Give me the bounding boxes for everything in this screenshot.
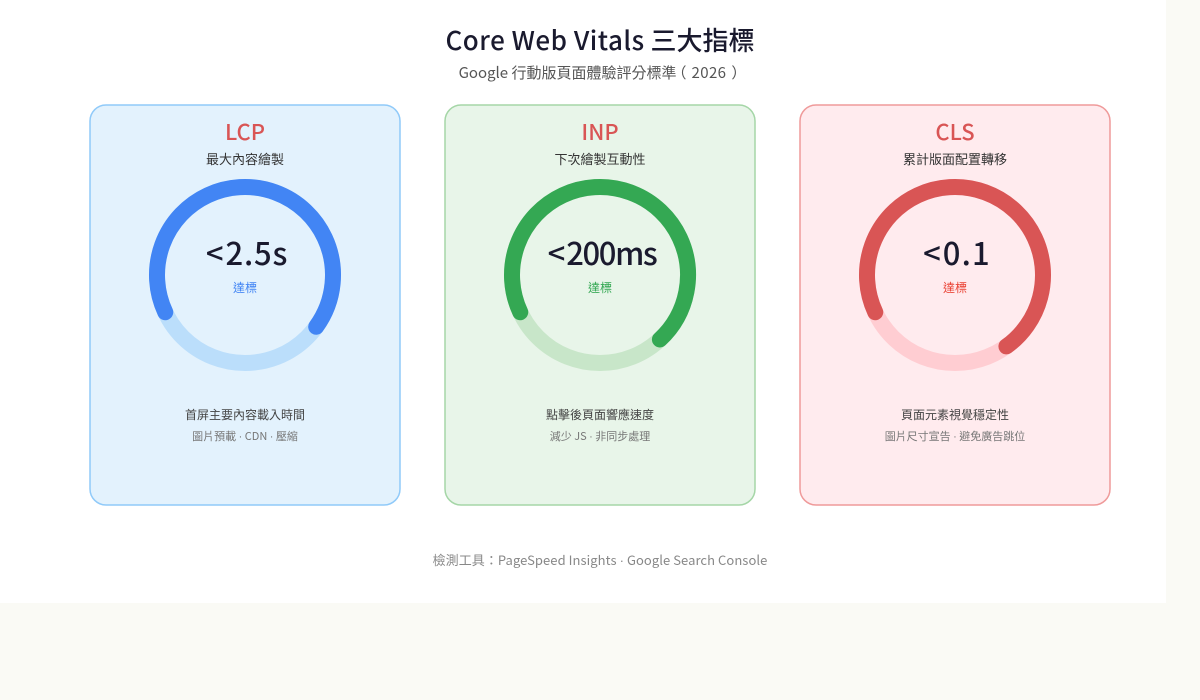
- CLS heading: CLS: [935, 115, 975, 147]
- INP threshold value: <200ms: [548, 229, 656, 274]
- panel: INP: [444, 104, 756, 506]
- CLS gauge and card background: [799, 104, 1111, 506]
- footer note: 檢測工具：PageSpeed Insights · Google Search Console: [433, 550, 767, 569]
- LCP gauge and card background: [89, 104, 401, 506]
- LCP status: 達標: [233, 279, 257, 296]
- LCP subtitle: 最大內容繪製: [206, 149, 284, 168]
- CLS tips: 圖片尺寸宣告 · 避免廣告跳位: [885, 428, 1025, 444]
- title: Core Web Vitals 三大指標: [445, 21, 754, 58]
- INP gauge and card background: [444, 104, 756, 506]
- LCP heading: LCP: [225, 115, 265, 147]
- subtitle: Google 行動版頁面體驗評分標準（ 2026 ）: [459, 62, 746, 83]
- LCP tips: 圖片預載 · CDN · 壓縮: [192, 428, 298, 444]
- panel: CLS: [799, 104, 1111, 506]
- INP description: 點擊後頁面響應速度: [546, 406, 654, 423]
- CLS subtitle: 累計版面配置轉移: [903, 149, 1007, 168]
- CLS threshold value: <0.1: [923, 229, 991, 274]
- LCP threshold value: <2.5s: [206, 229, 288, 274]
- INP subtitle: 下次繪製互動性: [554, 149, 646, 168]
- CLS description: 頁面元素視覺穩定性: [901, 406, 1009, 423]
- INP heading: INP: [581, 115, 619, 147]
- LCP description: 首屏主要內容載入時間: [185, 406, 305, 423]
- INP tips: 減少 JS · 非同步處理: [550, 428, 650, 444]
- panel: LCP: [89, 104, 401, 506]
- CLS status: 達標: [943, 279, 967, 296]
- INP status: 達標: [588, 279, 612, 296]
